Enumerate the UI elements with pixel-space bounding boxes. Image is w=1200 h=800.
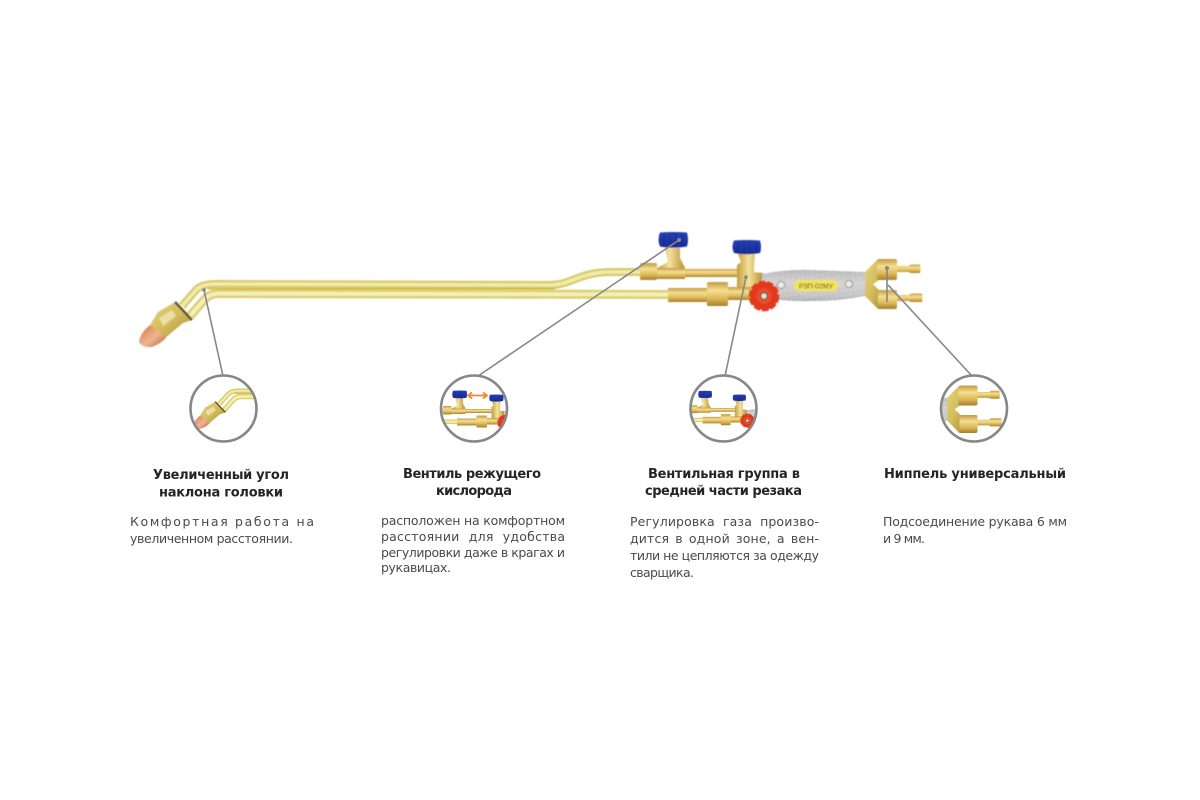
column 3 text [630, 514, 820, 580]
column 2 text [381, 513, 565, 575]
hose nipples [897, 264, 922, 302]
column 1 text: Комфортная работа на [130, 514, 314, 529]
column 4 heading: Ниппель универсальный [884, 467, 1066, 482]
column 4 text: Подсоединение рукава 6 мм [883, 514, 1067, 529]
callout line 4 [885, 266, 972, 376]
column 3 heading [645, 467, 802, 499]
detail circle: head angle [189, 374, 258, 443]
torch head [139, 302, 192, 347]
detail circle: universal nipple [940, 374, 1008, 443]
column 1 text [130, 514, 314, 546]
upper tube [182, 272, 645, 306]
column 3 heading: Вентильная группа в [648, 467, 800, 482]
column 1 text: увеличенном расстоянии. [130, 531, 293, 546]
rivets [777, 280, 853, 289]
column 3 heading: средней части резака [645, 484, 802, 499]
model label [794, 280, 838, 291]
column 1 heading: Увеличенный угол [153, 468, 289, 483]
red knob [749, 281, 779, 311]
column 2 text: рукавицах. [381, 560, 451, 575]
blue valve knob: cutting oxygen [658, 232, 688, 248]
cutting torch illustration [139, 232, 922, 347]
column 1 heading [153, 468, 289, 500]
arrow: orange double-headed [468, 392, 487, 398]
callout line 2 [478, 238, 681, 376]
detail circle: valve group [689, 374, 758, 443]
callout line 1 [202, 288, 223, 376]
blue valve knob: mixture [732, 240, 761, 254]
column 2 heading: Вентиль режущего [403, 467, 541, 482]
column 2 text: расстоянии для удобства [381, 529, 565, 544]
callout line 3 [725, 275, 748, 376]
column 2 heading: кислорода [436, 484, 512, 499]
detail circle: oxygen valve distance [440, 374, 508, 443]
model label: РЗП-02МУ [799, 283, 834, 290]
column 2 text: расположен на комфортном [381, 513, 565, 528]
grey handle [762, 270, 866, 301]
hose connector fork [865, 259, 897, 309]
column 4 text [883, 514, 1067, 546]
column 3 text: тили не цепляются за одежду [630, 548, 820, 563]
column 3 text: сварщика. [630, 565, 694, 580]
column 3 text: дится в одной зоне, а вен- [630, 531, 819, 546]
column 2 text: регулировки даже в крагах и [381, 545, 565, 560]
column 2 heading [403, 467, 541, 499]
column 1 heading: наклона головки [159, 486, 283, 500]
infographic canvas [130, 231, 1066, 580]
lower valve body [668, 282, 752, 306]
lower tube [190, 289, 672, 316]
column 4 text: и 9 мм. [883, 531, 925, 546]
upper valve assembly [640, 248, 763, 288]
column 3 text: Регулировка газа произво- [630, 514, 819, 529]
